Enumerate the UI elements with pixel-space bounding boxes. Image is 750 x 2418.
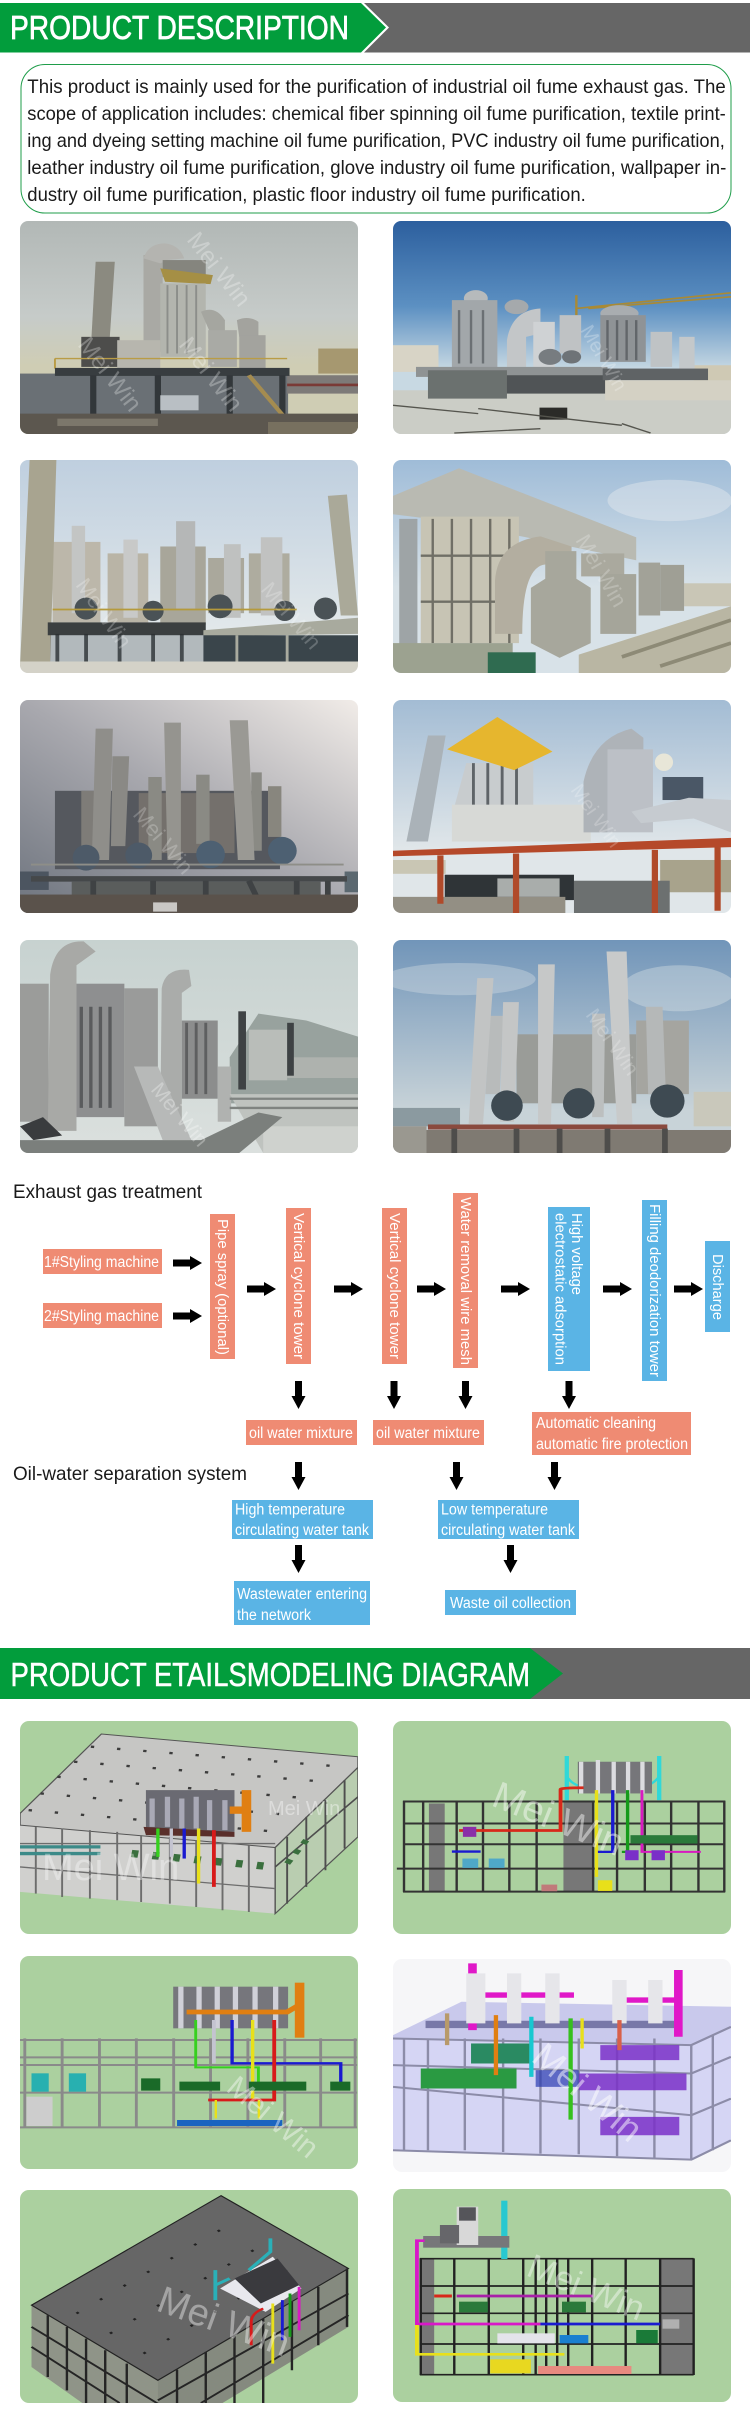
flow box: automatic cleaning and fire protection — [532, 1412, 691, 1455]
flow box: waste oil collection — [445, 1590, 576, 1615]
flow box: oil water mixture 1 — [246, 1420, 357, 1445]
arrows: downward flow — [292, 1381, 576, 1573]
diagram 3: side elevation light grey frame — [20, 1956, 358, 2169]
text panel: product description — [21, 64, 731, 213]
diagram 4: lavender three-storey frame: Mei Win — [525, 2035, 651, 2150]
flow box: 2# styling machine: 2#Styling machine — [44, 1308, 159, 1325]
diagram 2: front elevation with coloured pipes: Mei Win — [487, 1774, 630, 1865]
flow box: oil water mixture 1: oil water mixture — [249, 1425, 353, 1442]
photo 1: rooftop tower under grey sky: Mei Win — [72, 332, 147, 417]
header: product description — [0, 3, 750, 52]
photo 4: duct and cyclone close-up — [393, 460, 732, 673]
flow box: low temperature tank: circulating water tank — [441, 1522, 575, 1539]
flow box: 1# styling machine — [43, 1249, 162, 1274]
photo 5: chimneys against dusk sky: Mei Win — [128, 802, 198, 879]
diagram 5: dark isometric building: Mei Win — [152, 2279, 295, 2365]
photo 1: rooftop tower under grey sky — [20, 221, 358, 434]
text panel: product description: scope of application includes: chemical fiber spinning oil fume purification, textile print- — [27, 103, 726, 125]
flow box: vertical cyclone tower 1: Vertical cyclone tower — [290, 1213, 306, 1359]
diagram 1: isometric grey roof building — [20, 1721, 358, 1934]
text panel: product description: leather industry oil fume purification, glove industry oil fume purification, wallpaper in- — [27, 157, 726, 179]
photo 4: duct and cyclone close-up: Mei Win — [571, 530, 632, 611]
flow box: waste oil collection: Waste oil collection — [450, 1595, 571, 1612]
photo 6: yellow-topped tower on red platform: Mei Win — [566, 780, 625, 852]
flow box: automatic cleaning and fire protection: Automatic cleaning — [536, 1415, 656, 1432]
photo 2: silver towers under blue sky — [393, 221, 731, 434]
photo 3: five towers with two chimneys: Mei Win — [256, 577, 326, 654]
flow box: discharge: Discharge — [709, 1254, 725, 1320]
text panel: product description: dustry oil fume purification, plastic floor industry oil fume purification. — [27, 184, 586, 206]
flow box: vertical cyclone tower 2 — [382, 1208, 407, 1364]
photo 6: yellow-topped tower on red platform — [393, 700, 731, 913]
photo 5: chimneys against dusk sky — [20, 700, 358, 913]
flow box: 2# styling machine — [43, 1303, 162, 1328]
photo 7: silver ducts and hills in fog: Mei Win — [146, 1078, 213, 1151]
flow box: vertical cyclone tower 1 — [286, 1208, 311, 1364]
diagram 1: isometric grey roof building: Mei Win — [42, 1847, 179, 1889]
flow box: high temperature tank: High temperature — [235, 1502, 345, 1518]
photo 8: tall silver chimneys on red platform: Mei Win — [581, 1005, 643, 1080]
text panel: product description: This product is mainly used for the purification of industrial oil fume exhaust gas. The — [27, 76, 726, 98]
heading text: PRODUCT ETAILSMODELING DIAGRAM — [10, 1656, 530, 1693]
diagram 1: isometric grey roof building: Mei Win — [268, 1798, 340, 1820]
flow box: water removal wire mesh — [453, 1193, 478, 1368]
section label: oil-water separation system: Oil-water separation system — [13, 1463, 247, 1485]
flow box: 1# styling machine: 1#Styling machine — [44, 1254, 159, 1271]
photo 3: five towers with two chimneys — [20, 460, 358, 673]
flow box: water removal wire mesh: Water removal wire mesh — [457, 1197, 473, 1365]
photo 2: silver towers under blue sky: Mei Win — [576, 322, 631, 395]
diagram 2: front elevation with coloured pipes — [393, 1721, 731, 1934]
flow box: high voltage electrostatic adsorption: electrostatic adsorption — [552, 1213, 568, 1365]
flow box: wastewater entering the network: Wastewater entering — [237, 1586, 367, 1603]
section label: exhaust gas treatment: Exhaust gas treatment — [13, 1181, 203, 1203]
diagram 4: lavender three-storey frame — [393, 1959, 731, 2172]
flow box: automatic cleaning and fire protection: automatic fire protection — [536, 1436, 688, 1453]
flow box: filling deodorization tower — [642, 1200, 667, 1381]
diagram 6: rear elevation with equipment — [393, 2189, 731, 2402]
flow box: high temperature tank — [232, 1500, 373, 1539]
photo 1: rooftop tower under grey sky: Mei Win — [173, 332, 248, 417]
flow box: high voltage electrostatic adsorption: High voltage — [568, 1213, 584, 1295]
flow box: low temperature tank: Low temperature — [441, 1502, 548, 1518]
flow box: vertical cyclone tower 2: Vertical cyclone tower — [386, 1213, 402, 1359]
heading text: PRODUCT DESCRIPTION — [10, 9, 349, 46]
flow box: wastewater entering the network: the network — [237, 1607, 311, 1624]
flow box: wastewater entering the network — [234, 1581, 370, 1625]
flow box: high temperature tank: circulating water tank — [235, 1522, 369, 1539]
photo 1: rooftop tower under grey sky: Mei Win — [181, 227, 256, 312]
flow box: oil water mixture 2 — [373, 1420, 484, 1445]
diagram 6: rear elevation with equipment: Mei Win — [522, 2247, 650, 2328]
flow box: discharge — [705, 1241, 730, 1332]
header: product details modeling diagram — [0, 1648, 750, 1699]
flow box: filling deodorization tower: Filling deodorization tower — [646, 1204, 662, 1377]
photo 8: tall silver chimneys on red platform — [382, 940, 737, 1153]
arrows: process flow to the right — [173, 1256, 703, 1323]
flow box: pipe spray — [210, 1214, 235, 1359]
flow box: low temperature tank — [438, 1500, 579, 1539]
flow box: high voltage electrostatic adsorption — [548, 1207, 590, 1371]
flow box: oil water mixture 2: oil water mixture — [376, 1425, 480, 1442]
diagram 5: dark isometric building — [20, 2190, 358, 2404]
photo 7: silver ducts and hills in fog — [20, 940, 358, 1153]
diagram 3: side elevation light grey frame: Mei Win — [221, 2070, 325, 2165]
flow box: pipe spray: Pipe spray (optional) — [214, 1219, 230, 1355]
photo 3: five towers with two chimneys: Mei Win — [71, 574, 137, 653]
